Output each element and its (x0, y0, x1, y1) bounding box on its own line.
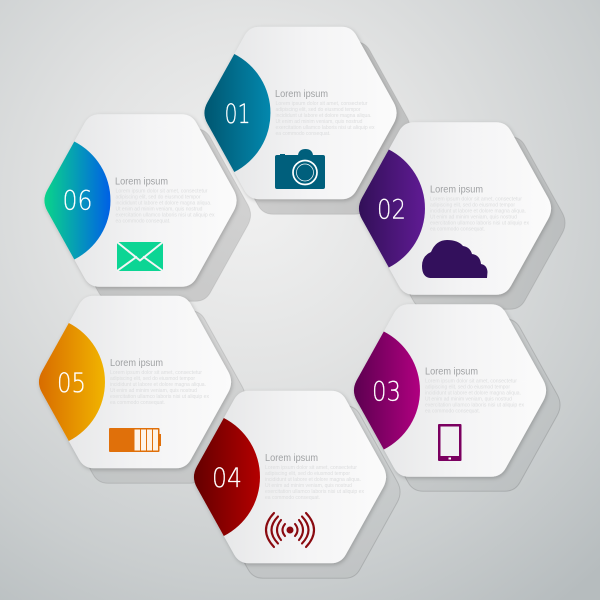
body text: Ut enim ad minim veniam, quis nostrud (276, 119, 363, 125)
body text: Lorem ipsum dolor sit amet, consectetur (265, 465, 357, 471)
icon: cloud (422, 240, 488, 278)
body text: ea commodo consequat. (110, 400, 165, 406)
body text (276, 101, 375, 137)
body text: Ut enim ad minim veniam, quis nostrud (265, 483, 352, 489)
number 04: 04 (212, 463, 242, 494)
heading: Lorem ipsum (430, 184, 483, 196)
body text (110, 370, 209, 406)
body text: ea commodo consequat. (116, 218, 170, 224)
body text: exercitation ullamco laboris nisi ut aliquip ex (265, 489, 364, 495)
body text: adipiscing elit, sed do eiusmod tempor (425, 384, 510, 390)
body text: Ut enim ad minim veniam, quis nostrud (425, 396, 512, 402)
body text (265, 465, 364, 501)
icon: smartphone (438, 424, 462, 461)
body text: exercitation ullamco laboris nisi ut aliquip ex (116, 212, 215, 218)
body text: adipiscing elit, sed do eiusmod tempor (430, 202, 515, 208)
panel: step 04 (194, 391, 386, 563)
icon: camera (275, 149, 325, 189)
heading: Lorem ipsum (115, 176, 168, 188)
heading: Lorem ipsum (425, 366, 478, 378)
panel: step 02 (359, 122, 551, 295)
body text: ea commodo consequat. (430, 226, 485, 232)
body text: ea commodo consequat. (265, 495, 320, 501)
icon: battery (109, 428, 161, 452)
body text: Lorem ipsum dolor sit amet, consectetur (430, 196, 522, 202)
number 01: 01 (224, 99, 250, 130)
icon: wireless signal (266, 513, 314, 547)
body text: exercitation ullamco laboris nisi ut aliquip ex (110, 394, 209, 400)
icon: envelope (117, 242, 163, 271)
body text: Lorem ipsum dolor sit amet, consectetur (425, 378, 517, 384)
body text: Ut enim ad minim veniam, quis nostrud (110, 388, 197, 394)
number 05: 05 (57, 368, 86, 399)
body text: exercitation ullamco laboris nisi ut aliquip ex (430, 220, 529, 226)
body text: adipiscing elit, sed do eiusmod tempor (116, 194, 201, 200)
body text: ea commodo consequat. (276, 131, 330, 137)
body text: incididunt ut labore et dolore magna aliqua. (116, 200, 212, 206)
panel: step 06 (44, 114, 237, 287)
body text: exercitation ullamco laboris nisi ut aliquip ex (425, 402, 524, 408)
hexagon back shadows (53, 42, 565, 578)
panel: step 03 (354, 304, 546, 477)
body text (116, 188, 215, 224)
body text: incididunt ut labore et dolore magna aliqua. (276, 113, 372, 119)
body text: Lorem ipsum dolor sit amet, consectetur (110, 370, 202, 376)
panel: step 01 (204, 27, 397, 199)
heading: Lorem ipsum (110, 357, 163, 369)
heading: Lorem ipsum (265, 452, 318, 464)
body text: ea commodo consequat. (425, 408, 480, 414)
body text: exercitation ullamco laboris nisi ut aliquip ex (276, 125, 375, 131)
body text: Lorem ipsum dolor sit amet, consectetur (276, 101, 368, 107)
body text (430, 196, 529, 232)
body text: Lorem ipsum dolor sit amet, consectetur (116, 188, 208, 194)
number 03: 03 (372, 376, 401, 408)
panel: step 05 (39, 296, 231, 468)
body text: adipiscing elit, sed do eiusmod tempor (265, 471, 350, 477)
number 06: 06 (62, 186, 92, 216)
body text: Ut enim ad minim veniam, quis nostrud (430, 214, 517, 220)
body text: incididunt ut labore et dolore magna aliqua. (430, 208, 526, 214)
body text (425, 378, 524, 414)
number 02: 02 (377, 194, 406, 226)
body text: adipiscing elit, sed do eiusmod tempor (276, 107, 361, 113)
body text: incididunt ut labore et dolore magna aliqua. (425, 390, 521, 396)
heading: Lorem ipsum (275, 88, 328, 100)
body text: incididunt ut labore et dolore magna aliqua. (265, 477, 361, 483)
body text: Ut enim ad minim veniam, quis nostrud (116, 206, 203, 212)
body text: adipiscing elit, sed do eiusmod tempor (110, 376, 195, 382)
body text: incididunt ut labore et dolore magna aliqua. (110, 382, 206, 388)
